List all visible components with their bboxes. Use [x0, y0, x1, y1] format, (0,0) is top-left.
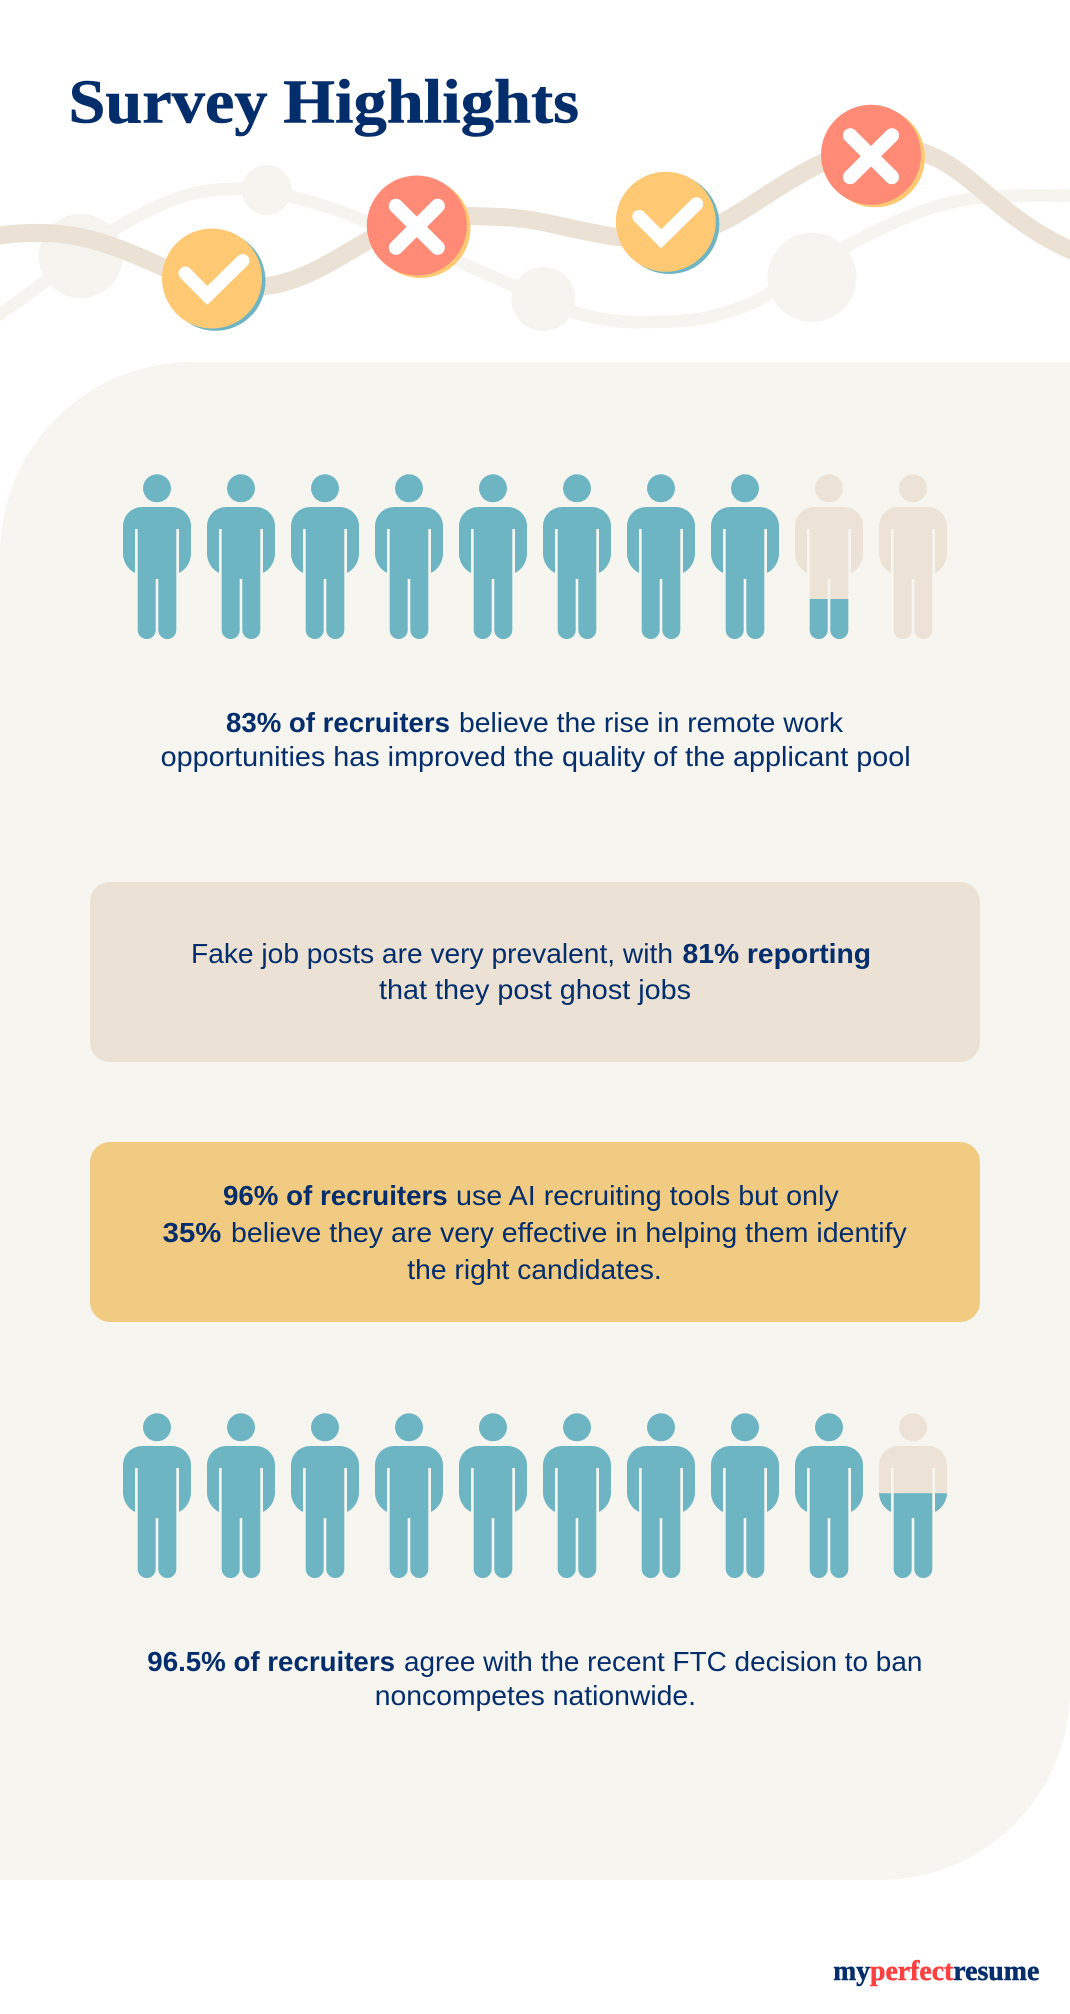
icon: check 2 — [616, 172, 719, 274]
pale background line — [0, 165, 1070, 331]
title: Highlights — [283, 69, 579, 137]
callout: AI recruiting tools: believe they are very effective in helping them identify — [231, 1217, 907, 1248]
callout: AI recruiting tools: the right candidates. — [407, 1254, 662, 1285]
logo: myperfectresume: resume — [953, 1956, 1039, 1987]
callout: fake job posts: that they post ghost jobs — [379, 974, 691, 1005]
callout: AI recruiting tools — [90, 1142, 980, 1322]
logo: myperfectresume: my — [833, 1956, 870, 1987]
text: 96.5 percent statement: agree with the recent FTC decision to ban — [404, 1646, 922, 1677]
text: 83 percent statement: 83% of recruiters — [226, 707, 450, 738]
title: Survey — [68, 69, 268, 137]
callout: fake job posts: Fake job posts are very prevalent, with — [191, 938, 673, 969]
icon: cross 2 — [821, 105, 925, 207]
beige trend line — [0, 148, 1070, 287]
logo: myperfectresume: perfect — [870, 1956, 954, 1987]
text: 83 percent statement — [161, 707, 911, 772]
callout: AI recruiting tools: 96% of recruiters — [223, 1180, 448, 1211]
callout: fake job posts — [90, 882, 980, 1062]
text: 96.5 percent statement: 96.5% of recruiters — [147, 1646, 395, 1677]
callout: fake job posts: 81% reporting — [682, 938, 871, 969]
text: 83 percent statement: believe the rise in remote work — [459, 707, 844, 738]
callout: AI recruiting tools: 35% — [163, 1217, 221, 1248]
panel: main background — [0, 362, 1070, 1880]
callout: AI recruiting tools: use AI recruiting tools but only — [456, 1180, 839, 1211]
text: 96.5 percent statement — [147, 1646, 922, 1711]
logo: myperfectresume — [833, 1956, 1039, 1987]
text: 96.5 percent statement: noncompetes nationwide. — [375, 1680, 696, 1711]
pictogram: 96.5 percent of recruiters — [123, 1413, 947, 1578]
decorative chart line with check and cross markers — [0, 105, 1070, 331]
pictogram: 83 percent of recruiters — [123, 474, 947, 639]
icon: check 1 — [162, 228, 266, 331]
text: 83 percent statement: opportunities has improved the quality of the applicant pool — [161, 741, 911, 772]
icon: cross 1 — [367, 176, 470, 278]
title — [68, 69, 579, 137]
